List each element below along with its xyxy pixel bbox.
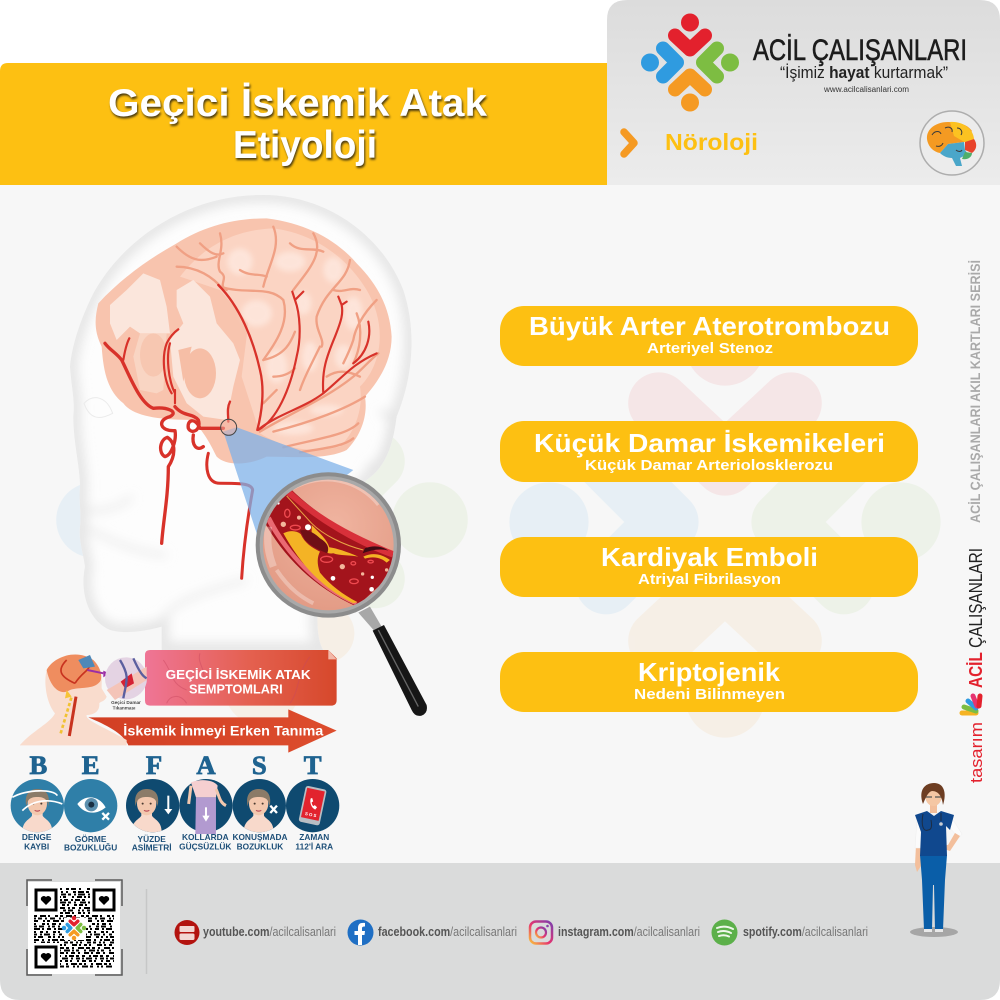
- BE FAST letters: E: [82, 750, 100, 780]
- red arrow: İskemik İnmeyi Erken Tanıma: [123, 723, 324, 739]
- divider: [146, 889, 148, 974]
- magnifier lens: atherosclerotic artery: [256, 472, 401, 618]
- brand text: www.acilcalisanlari.com: [823, 85, 909, 94]
- panel: brand header: [607, 0, 1000, 185]
- social: instagram: [530, 922, 700, 944]
- icon captions: ASİMETRİ: [132, 843, 172, 853]
- BE FAST letters: F: [146, 750, 162, 780]
- social: instagram: instagram.com/acilcalisanlari: [558, 925, 700, 939]
- social: youtube: [174, 920, 336, 945]
- panel: cause 3: [500, 537, 918, 597]
- panel: cause 2: Küçük Damar Arteriolosklerozu: [585, 457, 833, 474]
- BE FAST letters: S: [252, 750, 267, 780]
- icon captions: ZAMAN: [299, 832, 329, 842]
- icon captions: 112'İ ARA: [295, 841, 333, 851]
- panel: symptoms BE-FAST: [11, 650, 339, 853]
- icon captions: [22, 832, 333, 853]
- callout: zoom cone: [223, 427, 353, 543]
- social: youtube: youtube.com/acilcalisanlari: [203, 925, 336, 939]
- symptoms banner: GEÇİCİ İSKEMİK ATAK: [166, 667, 311, 682]
- illustration: head with brain and arteries: [70, 195, 427, 716]
- panel: cause 4: Kriptojenik: [638, 657, 781, 687]
- vertical brand credit: [966, 548, 986, 783]
- panel: cause 2: [500, 421, 918, 482]
- icon: occluded vessel circle: [105, 657, 147, 711]
- icon captions: KONUŞMADA: [232, 832, 288, 842]
- callout: artery spot ring: [221, 419, 237, 435]
- panel: cause 4: Nedeni Bilinmeyen: [634, 686, 785, 703]
- icon captions: GÜÇSÜZLÜK: [179, 841, 231, 851]
- watermark: logo right: [509, 306, 941, 738]
- social: facebook: [348, 920, 517, 946]
- panel: yellow title band: [0, 63, 608, 185]
- icon: emergency phone: S O S: [305, 811, 317, 818]
- brain: [96, 218, 392, 464]
- red arrow: [88, 709, 337, 753]
- category label: Nöroloji: [665, 129, 758, 155]
- character: nurse: [910, 783, 962, 937]
- BE FAST letters: B: [29, 750, 47, 780]
- symptoms banner: [145, 650, 337, 706]
- vertical series text: ACİL ÇALIŞANLARI AKIL KARTLARI SERİSİ: [967, 260, 983, 523]
- panel: cause 3: Kardiyak Emboli: [601, 542, 818, 572]
- head silhouette: [70, 195, 412, 650]
- brand text: “İşimiz hayat kurtarmak”: [780, 63, 948, 82]
- icon: vision loss: [64, 779, 117, 832]
- vertical brand credit: tasarım: [967, 722, 986, 783]
- BE FAST letters: T: [304, 750, 322, 780]
- icon captions: BOZUKLUĞU: [64, 842, 117, 853]
- icon: speech difficulty: [233, 779, 286, 832]
- icon captions: DENGE: [22, 832, 52, 842]
- panel: cause 1: Büyük Arter Aterotrombozu: [529, 311, 890, 341]
- panel: page body: [0, 185, 1000, 863]
- icon: emergency phone: [286, 779, 339, 832]
- icon captions: BOZUKLUK: [237, 841, 283, 851]
- QR code: [27, 880, 122, 975]
- icon: category chevron: [624, 132, 634, 154]
- panel: cause 3: Atriyal Fibrilasyon: [638, 571, 781, 588]
- icon captions: KOLLARDA: [182, 832, 229, 842]
- icon captions: YÜZDE: [138, 834, 166, 844]
- icon: small colour logo: [962, 696, 980, 713]
- BE FAST letters: A: [196, 750, 216, 780]
- heading: title: Etiyoloji: [233, 124, 377, 167]
- panel: cause 4: [500, 652, 918, 712]
- panel: cause 1: [500, 306, 918, 366]
- icon: patient head profile: [20, 654, 127, 745]
- icon: occluded vessel circle: Tıkanması: [113, 706, 135, 711]
- icon: magnifier handle: [358, 607, 427, 716]
- BE FAST letters: [29, 750, 322, 780]
- panel: cause 2: Küçük Damar İskemikeleri: [534, 428, 885, 458]
- icon: occluded vessel circle: Geçici Damar: [111, 700, 141, 705]
- panel: cause 1: Arteriyel Stenoz: [647, 340, 773, 357]
- brand text: [753, 34, 967, 94]
- icon: brain badge: [920, 111, 984, 175]
- icon: brand logo: [641, 14, 739, 112]
- arteries: [105, 285, 377, 578]
- social: facebook: facebook.com/acilcalisanlari: [378, 925, 517, 939]
- panel: footer: [0, 863, 1000, 1000]
- symptoms banner: SEMPTOMLARI: [189, 681, 283, 696]
- heading: title: Geçici İskemik Atak: [108, 82, 487, 125]
- vertical brand credit: ACİL ÇALIŞANLARI: [966, 548, 986, 688]
- social: spotify: spotify.com/acilcalisanlari: [743, 925, 868, 939]
- heading: title: [108, 82, 487, 167]
- social: spotify: [712, 920, 868, 946]
- icon captions: GÖRME: [75, 834, 107, 844]
- icon: balance loss: [11, 779, 64, 832]
- icon: facial droop: [126, 779, 179, 832]
- icon captions: KAYBI: [24, 841, 49, 851]
- watermark: logo left: [56, 314, 468, 726]
- icon: arm weakness: [179, 779, 233, 834]
